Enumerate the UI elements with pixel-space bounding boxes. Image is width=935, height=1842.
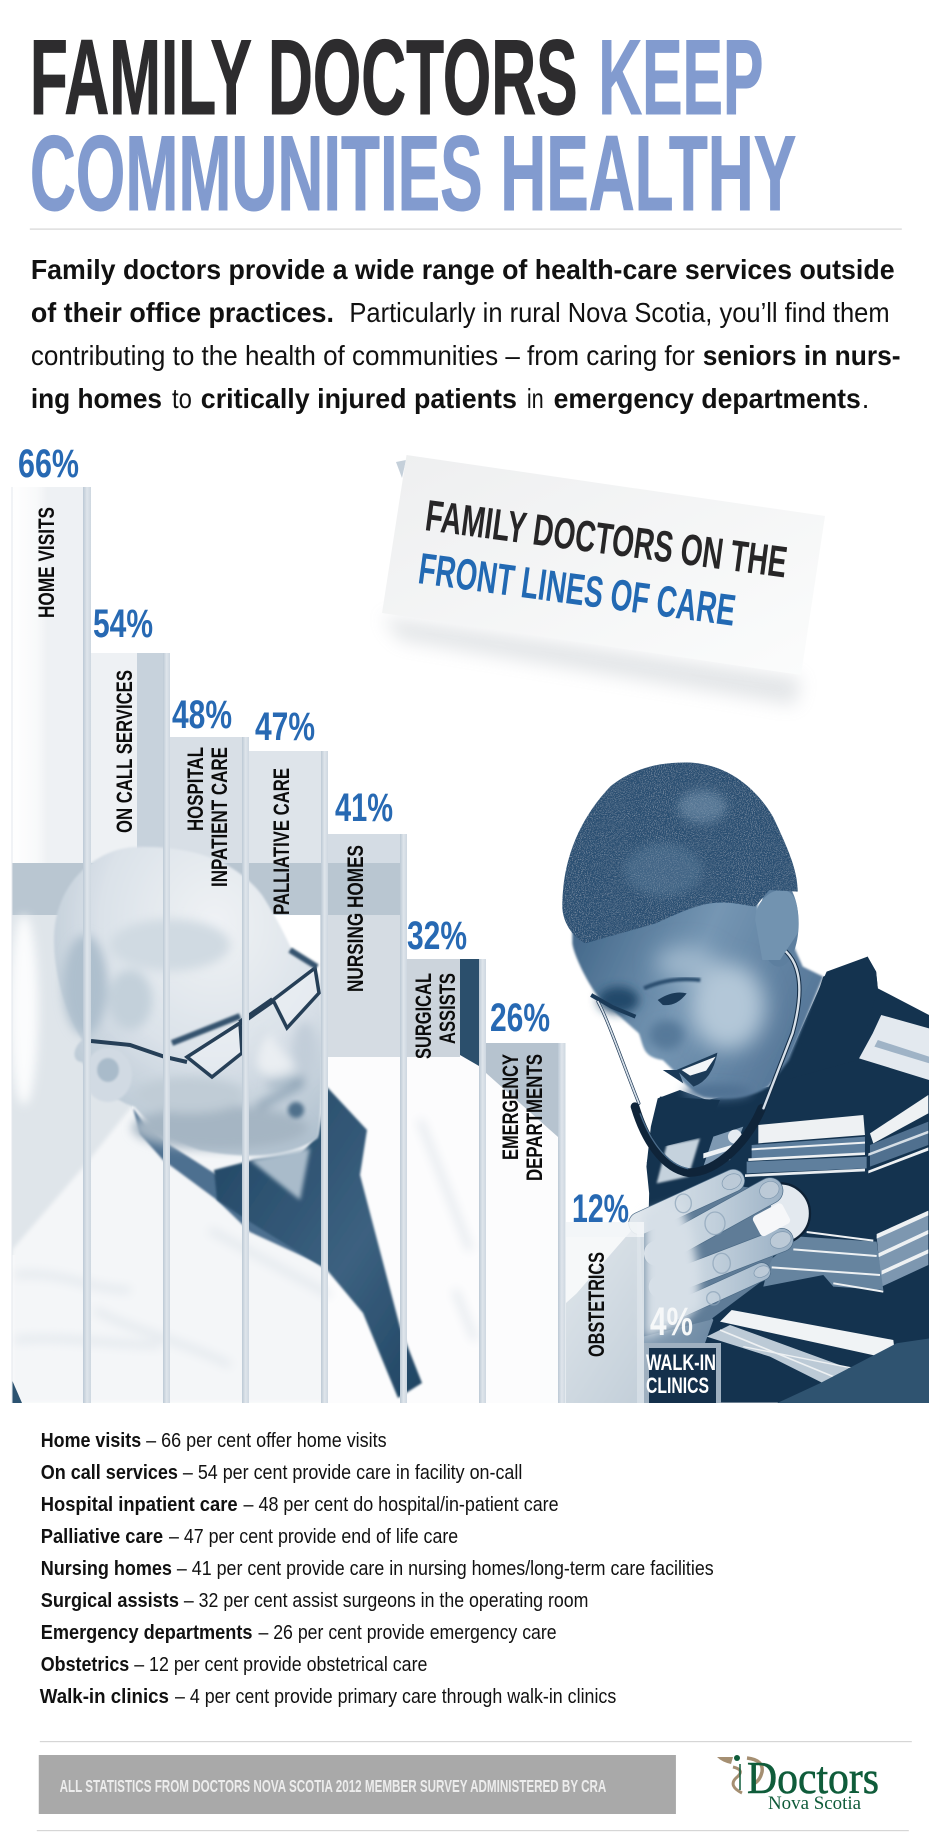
chest piece bbox=[770, 1182, 811, 1242]
percentage values: 66% bbox=[18, 442, 79, 486]
legend list: – 32 per cent assist surgeons in the operating room bbox=[184, 1590, 588, 1612]
sleeve stripes bbox=[859, 1015, 929, 1080]
percentage values: 48% bbox=[172, 693, 232, 737]
legend list: – 47 per cent provide end of life care bbox=[169, 1526, 458, 1548]
legend list: – 26 per cent provide emergency care bbox=[258, 1622, 557, 1644]
bar labels: HOSPITAL bbox=[183, 747, 208, 831]
chest stripes bbox=[758, 1115, 865, 1143]
legend list: Hospital inpatient care bbox=[41, 1494, 238, 1516]
photo: boy with stethoscope bbox=[562, 762, 929, 1403]
doctor ear bbox=[91, 1050, 131, 1102]
percentage values: 12% bbox=[572, 1187, 629, 1231]
boy mouth bbox=[676, 1053, 717, 1087]
bar labels: NURSING HOMES bbox=[343, 845, 368, 992]
bar labels: WALK-IN bbox=[646, 1350, 716, 1375]
boy ear bbox=[762, 890, 799, 961]
forearm bbox=[777, 1338, 930, 1403]
source banner bbox=[39, 1755, 676, 1814]
bar labels: INPATIENT CARE bbox=[207, 747, 232, 887]
legend list: – 12 per cent provide obstetrical care bbox=[134, 1654, 427, 1676]
intro paragraph: Family doctors provide a wide range of health-care services outside bbox=[31, 254, 895, 285]
legend list: – 4 per cent provide primary care through walk-in clinics bbox=[175, 1686, 616, 1708]
doctor white coat bbox=[12, 1100, 335, 1403]
intro paragraph: contributing to the health of communities – from caring for bbox=[31, 340, 695, 371]
legend list: On call services bbox=[41, 1462, 178, 1484]
doctor glasses bbox=[91, 950, 319, 1077]
boy shirt stripes and hand bbox=[566, 1095, 929, 1403]
bar labels: DEPARTMENTS bbox=[522, 1054, 547, 1181]
legend list: Home visits bbox=[41, 1430, 141, 1452]
finger nails bbox=[719, 1171, 793, 1280]
bar labels bbox=[34, 507, 716, 1398]
bar: obstetrics overlay bbox=[540, 1222, 644, 1403]
legend list: – 48 per cent do hospital/in-patient care bbox=[244, 1494, 559, 1516]
chart: stepped bars over doctor photo bbox=[10, 487, 565, 1403]
legend list: – 66 per cent offer home visits bbox=[146, 1430, 387, 1452]
bar labels: SURGICAL bbox=[411, 973, 436, 1059]
logo: Doctors Nova Scotia bbox=[717, 1752, 879, 1814]
legend list: Walk-in clinics bbox=[40, 1686, 169, 1708]
photo: doctor bbox=[10, 487, 565, 1403]
percentage values: 4% bbox=[650, 1300, 693, 1344]
legend list: – 41 per cent provide care in nursing homes/long-term care facilities bbox=[177, 1558, 714, 1580]
boy face bbox=[572, 880, 823, 1098]
boy collar bbox=[819, 956, 878, 990]
intro paragraph: of their office practices. bbox=[31, 297, 334, 328]
percentage values: 32% bbox=[407, 914, 467, 958]
hand bbox=[640, 1183, 780, 1337]
boy eye and brow bbox=[658, 992, 687, 1005]
bar dividers bbox=[83, 487, 566, 1403]
intro paragraph: critically injured patients bbox=[201, 383, 517, 414]
stethoscope pad bbox=[752, 1203, 790, 1236]
icon: caduceus bbox=[717, 1755, 762, 1793]
knuckles bbox=[675, 1194, 730, 1305]
intro paragraph: . bbox=[862, 383, 869, 414]
legend list: Emergency departments bbox=[41, 1622, 252, 1644]
bar labels: CLINICS bbox=[646, 1373, 709, 1398]
legend list: Nursing homes bbox=[41, 1558, 172, 1580]
legend list: – 54 per cent provide care in facility on-call bbox=[183, 1462, 522, 1484]
boy hair bbox=[562, 763, 798, 960]
intro paragraph: seniors in nurs- bbox=[703, 340, 901, 371]
doctor collar shadow bbox=[133, 1108, 322, 1265]
bar: walk-in clinics bbox=[646, 1346, 718, 1406]
doctor head bbox=[54, 847, 322, 1156]
source banner: ALL STATISTICS FROM DOCTORS NOVA SCOTIA 2012 MEMBER SURVEY ADMINISTERED BY CRA bbox=[60, 1776, 606, 1796]
palm bbox=[644, 1203, 700, 1338]
legend list: Obstetrics bbox=[41, 1654, 129, 1676]
bar tint: surgical and emergency bbox=[407, 959, 460, 1057]
doctor nose bbox=[257, 1040, 295, 1080]
bar labels: HOME VISITS bbox=[34, 507, 59, 618]
bar labels: OBSTETRICS bbox=[584, 1252, 609, 1357]
percentage values: 26% bbox=[490, 996, 550, 1040]
legend list: Surgical assists bbox=[41, 1590, 179, 1612]
intro paragraph: Particularly in rural Nova Scotia, you’ll find them bbox=[349, 297, 890, 328]
legend list: Palliative care bbox=[41, 1526, 163, 1548]
intro paragraph: in bbox=[527, 383, 544, 414]
bar labels: EMERGENCY bbox=[498, 1054, 523, 1160]
note: chart heading bbox=[382, 455, 825, 705]
percentage values: 41% bbox=[335, 786, 393, 830]
legend list bbox=[40, 1430, 714, 1708]
intro paragraph: emergency departments bbox=[554, 383, 861, 414]
doctor facial shading bbox=[63, 919, 317, 1150]
title: KEEP bbox=[598, 17, 763, 137]
percentage values: 54% bbox=[93, 602, 153, 646]
doctor shirt and tie bbox=[214, 1087, 422, 1398]
upper chest shading bbox=[657, 1138, 700, 1183]
stethoscope tube bbox=[635, 1107, 762, 1173]
right sleeve stripes bbox=[870, 1095, 928, 1143]
boy shirt bbox=[646, 956, 929, 1403]
percentage values: 47% bbox=[255, 705, 315, 749]
note: chart heading: FRONT LINES OF CARE bbox=[416, 544, 738, 636]
stethoscope metal tubes bbox=[598, 935, 799, 1108]
logo: Doctors Nova Scotia: Doctors bbox=[747, 1752, 879, 1803]
intro paragraph bbox=[31, 254, 901, 414]
bar labels: ON CALL SERVICES bbox=[112, 670, 137, 833]
bar labels: PALLIATIVE CARE bbox=[269, 768, 294, 915]
percentage values bbox=[18, 442, 693, 1344]
lower white band bbox=[720, 1310, 895, 1357]
logo: Doctors Nova Scotia: Nova Scotia bbox=[768, 1793, 862, 1814]
fingers bbox=[640, 1181, 782, 1313]
arm bbox=[566, 1232, 714, 1403]
intro paragraph: ing homes bbox=[31, 383, 162, 414]
title bbox=[30, 17, 796, 233]
intro paragraph: to bbox=[172, 383, 192, 414]
bar labels: ASSISTS bbox=[435, 973, 460, 1044]
lower chest stripes bbox=[763, 1237, 883, 1290]
doctor coat folds bbox=[15, 1120, 475, 1365]
